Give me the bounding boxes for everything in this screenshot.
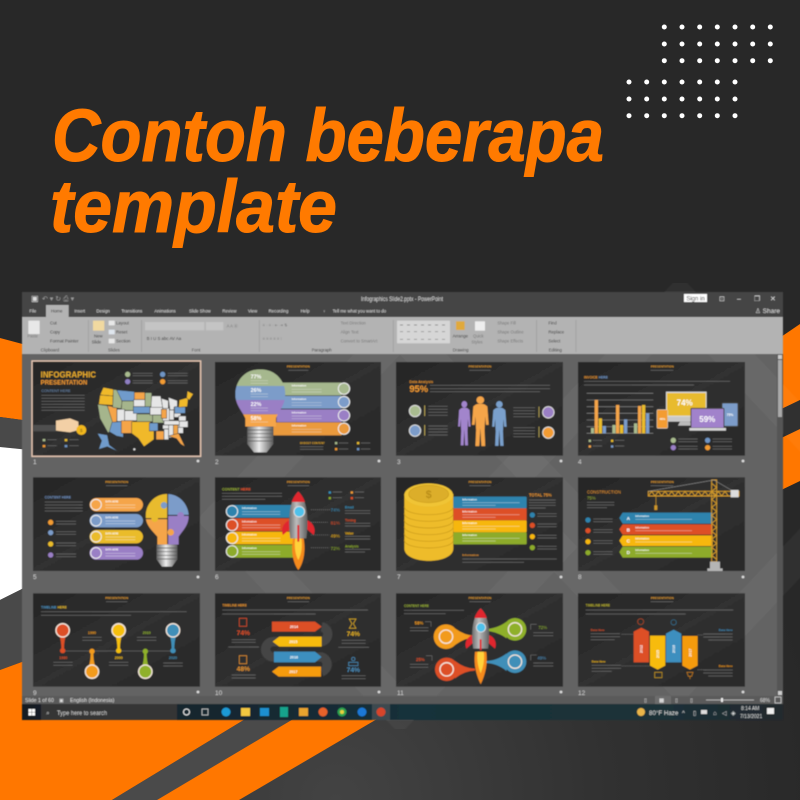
slide 3: data analysis silhouettes: PRESENTATION [469,365,491,369]
slide 8: construction crane: 75% [587,495,596,500]
ribbon tabs: Home [51,309,63,314]
stat: 74% yellow: 74% [347,631,360,638]
icon: hand holding coin: $ [80,428,83,434]
slide numbers: 4 [578,459,582,466]
icons [638,619,693,679]
slide 5: pills and puzzle bulb: PRESENTATION [105,480,128,484]
pin 2000 [109,624,128,665]
title bar: ❐ [754,295,760,303]
slide 9: timeline pins: TIMELINE HERE [41,605,67,609]
right decorative stripes [775,324,800,493]
pills: DATA HERE [105,532,119,535]
pin 2000: 2000 [115,656,123,660]
stats: Value [345,532,354,536]
taskbar [22,704,783,720]
title bar: ✕ [770,296,776,303]
stat: 48% orange: 48% [237,666,250,673]
ribbon: A A Ⓐ [227,323,238,329]
ribbon tabs: ♀ [323,309,326,314]
bands: Information [242,506,257,510]
labels: Data Here [591,628,605,632]
pin 2020 [163,624,183,666]
ribbon: B I U S abc AV Aa [147,336,182,341]
slide 1: US map infographic: PRESENTATION [41,380,87,386]
stats: 49% [331,533,340,538]
ribbon right groups: Select [548,338,561,343]
year pentagons [634,628,698,670]
ribbon: Convert to SmartArt [341,338,378,343]
ribbon tabs: Recording [269,309,289,314]
status bar [22,696,783,704]
bands: Information [462,497,477,501]
bands [619,513,713,558]
ribbon right groups [397,320,576,353]
status bar: ▣ [59,698,64,704]
slide 4: bar chart and devices: PRESENTATION [651,365,674,369]
stats: 72% [331,546,340,551]
slide 12: vertical arrows timeline: PRESENTATION [651,596,674,600]
bands: C [627,539,631,544]
system tray: ◁ [722,711,727,717]
slide numbers: 12 [578,690,586,697]
system tray: 8:14 AM [741,706,759,712]
pills: DATA HERE [105,516,119,519]
labels [591,628,733,676]
slide numbers [33,459,586,697]
labels: Data Here [719,628,733,632]
slide 11: rocket with circles: PRESENTATION [469,596,491,600]
slide 7: coin stack: Information [462,553,479,557]
icon: bulb [233,369,287,452]
powerpoint window screenshot [22,292,800,720]
status bar: ▯ [644,698,647,704]
slide numbers: 6 [215,574,219,581]
ribbon right groups: Shape Effects [497,338,523,343]
title bar: – [737,296,741,303]
ribbon tabs: Slide Show [189,309,212,314]
bands: Information [242,546,257,550]
ribbon: Clipboard [41,348,60,353]
ribbon right groups: Replace [548,329,565,334]
title bar: Infographics Slide2.pptx - PowerPoint [361,296,443,303]
bands: Information [635,515,649,518]
stats: Analysis [345,545,359,549]
connector shapes [455,622,507,678]
slide 2: light bulb: BUDGET CONTENT [300,441,325,445]
legend [43,372,188,447]
bands: A [627,516,631,521]
horizontal bands: Information [292,424,307,428]
slide 10: timeline arrows: TIMELINE HERE [222,604,247,608]
windows start icon [28,709,35,716]
system tray: ⌂ [713,711,717,717]
slide numbers: 9 [33,690,37,697]
ribbon tabs: Insert [74,309,86,314]
pin 1990: 1990 [88,631,96,635]
year pentagons: 2015 [656,650,660,658]
slide numbers: 10 [215,690,223,697]
title bar: ⊡ [719,296,725,303]
slide 8: construction crane [578,477,745,571]
status bar: ▯ [675,698,678,704]
devices: 74% [677,399,693,408]
ribbon: Paragraph [312,348,332,353]
slide numbers: 5 [33,574,37,581]
devices [657,392,738,431]
ribbon tabs: File [29,309,37,314]
slide numbers: 11 [397,690,404,697]
ribbon tabs: Review [222,309,237,314]
title bar [22,292,783,317]
bands [226,505,294,558]
ribbon: Slide [92,340,102,345]
slide 6: rocket with bands: CONTENT HERE [222,487,251,491]
horizontal bands: Information [292,384,307,388]
status bar: ▯ [690,698,693,704]
stats [311,506,370,552]
icon: hand holding coin [33,418,86,435]
scrollbar [777,354,783,696]
icon: rocket [466,608,496,684]
status bar: 68% [760,698,771,704]
stats: Email [345,506,354,510]
slide 9: timeline pins [33,593,200,687]
system tray: ▯ [693,711,696,717]
icon: rocket [282,492,315,570]
ribbon right groups: Find [548,320,557,325]
pin 2020: 2020 [169,656,177,660]
title bar: Sign in [686,296,705,302]
ribbon right groups: Editing [549,348,562,353]
slide 3: data analysis silhouettes [396,362,563,456]
stats: 58% [415,620,423,625]
year arrows [272,622,322,677]
slide 7: coin stack: TOTAL 75% [529,493,552,498]
stats [410,620,553,667]
ribbon: Layout [116,320,130,325]
pills: DATA HERE [105,549,119,552]
ribbon tabs: Tell me what you want to do [333,309,387,314]
dot grid top right [626,24,773,118]
title: Contoh beberapa [52,94,604,177]
slide numbers: 3 [397,459,401,466]
bands: Information [462,521,477,525]
icon: bulb: 77% [251,375,262,381]
title bar: ↶ ▾ ↻ ⎙ ▾ [42,296,75,303]
ribbon [22,317,783,354]
slide 7: coin stack: PRESENTATION [469,480,491,484]
ribbon: Reset [116,329,128,334]
bands: B [627,527,631,532]
bands: Information [242,533,257,537]
slide 2: light bulb: PRESENTATION [287,365,310,369]
slide numbers: 1 [33,459,37,466]
slide 8: construction crane: CONSTRUCTION [587,490,621,495]
year pentagons: 2017 [688,649,692,657]
slide 1: US map infographic: CONTENT HERE [41,388,71,393]
slide 3: data analysis silhouettes: Data Analysis [409,380,433,384]
year arrows: 2017 [289,670,297,674]
slide 5: pills and puzzle bulb: CONTENT HERE [45,495,72,499]
ribbon tabs: Animations [154,309,176,314]
title: template [50,165,337,248]
ribbon right groups: Quick [473,334,485,339]
slide 9: timeline pins: PRESENTATION [105,596,128,600]
bands: Information [635,526,649,529]
ribbon right groups: Drawing [453,348,469,353]
ribbon: Text Direction [341,320,366,325]
search box [41,704,177,720]
icon: coin stack: $ [426,489,432,501]
slide 5: pills and puzzle bulb [33,477,200,571]
ribbon: Copy [50,329,61,334]
title bar: ▣ [31,294,39,303]
bands [453,497,527,544]
icon: puzzle bulb [143,492,191,567]
slide 4: bar chart and devices: INVOICE HERE [584,376,609,380]
system tray: ^ [682,711,685,717]
ribbon tabs [29,305,387,317]
devices: 59% [699,415,715,424]
ribbon: ≡ · ≡ · ⇤ ⇥ ⇅ [263,323,288,328]
stat: 74% red: 74% [237,630,250,637]
system tray: 80°F Haze [649,710,679,717]
status bar: Slide 1 of 60 [25,698,54,704]
slide transition markers [197,460,744,693]
stats: 49% [537,656,546,661]
year pentagons: 2012 [640,645,644,653]
slide 2: light bulb [215,362,381,456]
horizontal bands: Information [292,397,307,401]
circles [434,618,526,681]
slide numbers: 2 [215,459,219,466]
window frame and slide sorter area [22,292,783,704]
ribbon: Cut [50,320,58,325]
system tray: ◈ [731,711,736,717]
ribbon: Section [116,338,131,343]
year pentagons: 2016 [672,645,676,653]
slide 11: rocket with circles [396,593,563,687]
slide 6: rocket with bands: PRESENTATION [287,480,310,484]
slide 4: bar chart and devices [578,362,745,456]
title [50,94,604,248]
labels: Data Here [592,660,606,664]
slide numbers: 8 [578,574,582,581]
year arrows: 2015 [289,640,297,644]
ribbon: Format Painter [50,338,79,343]
ribbon tabs: View [248,309,258,314]
icon: crane [648,480,739,571]
slide 12: vertical arrows timeline [578,593,745,687]
year arrows: 2014 [290,625,299,629]
system tray [637,706,774,720]
slide numbers: 7 [397,574,401,581]
slide 1: US map infographic: INFOGRAPHIC [41,369,96,379]
search box: ⌕ [46,710,50,717]
slide 6: rocket with bands [215,477,381,571]
bands: Information [635,538,649,541]
pin 1980: 1980 [59,656,67,660]
pills: DATA HERE [105,500,119,503]
stat: 74% blue: 74% [347,667,360,674]
slide 10: timeline arrows [215,593,381,687]
stats: 72% [538,625,547,630]
pin 2010: 2010 [143,631,151,635]
ribbon: ≡ ≡ ≡ ≡ ≡ ⁝ [263,336,282,341]
status bar: ▦ [659,698,665,704]
labels: Data Here [719,664,733,668]
US map [97,387,193,452]
title bar: ♙ Share [755,307,780,315]
slide 8: construction crane: PRESENTATION [651,480,674,484]
pin 2010 [137,631,156,678]
icon: bulb: 26% [251,388,262,394]
pin 1990 [82,631,102,678]
icon: bulb: 22% [251,402,262,408]
ribbon: Slides [108,348,120,353]
bar chart [587,393,653,433]
pin 1980 [53,624,73,665]
slide 1: US map infographic [32,361,201,456]
ribbon right groups: Shape Outline [497,329,524,334]
ribbon right groups: Styles [471,340,483,345]
bands: Information [462,509,477,513]
slide 10: timeline arrows: PRESENTATION [287,596,310,600]
status bar: English (Indonesia) [70,698,115,704]
stat: 48% orange [232,656,256,678]
search box: Type here to search [57,710,107,717]
bottom decorative stripes [0,715,384,800]
bands: Information [462,533,477,537]
icon: bulb: 58% [251,416,262,422]
stats: 25% [416,657,425,662]
ribbon tabs: Design [96,309,110,314]
year arrows: 2016 [290,655,298,659]
stat: 74% red [228,618,259,647]
stat: 74% blue [342,657,366,679]
stats: Timing [345,519,356,523]
ribbon: Font [192,348,201,353]
slide 11: rocket with circles: CONTENT HERE [404,604,429,608]
pills [90,498,143,560]
bands: Information [635,549,649,552]
devices: 46% [659,417,666,421]
taskbar app icons [184,704,390,720]
ribbon tabs: Transitions [121,309,142,314]
left decorative stripes [0,338,30,725]
icon: coin stack [404,483,453,561]
ribbon right groups: Arrange [453,334,469,339]
slide 7: coin stack [396,477,563,571]
stats: 74% [331,508,340,513]
ribbon: Paste [27,333,39,338]
devices: 75% [727,413,733,417]
horizontal bands [273,383,350,435]
ribbon right groups: Shape Fill [497,320,516,325]
stat: 74% yellow [338,619,369,647]
ribbon tabs: Help [301,309,310,314]
silhouettes [458,396,507,446]
bands: D [627,550,631,555]
ribbon: Align Text [341,329,359,334]
ribbon: New [94,333,104,338]
stats: 81% [331,520,340,525]
system tray: 7/13/2021 [740,714,762,720]
horizontal bands: Information [292,410,307,414]
watermark in sorter area [220,300,800,710]
slide 3: data analysis silhouettes: 95% [409,384,429,394]
bands: Information [242,519,257,523]
slide 12: vertical arrows timeline: TIMELINE HERE [586,604,610,608]
